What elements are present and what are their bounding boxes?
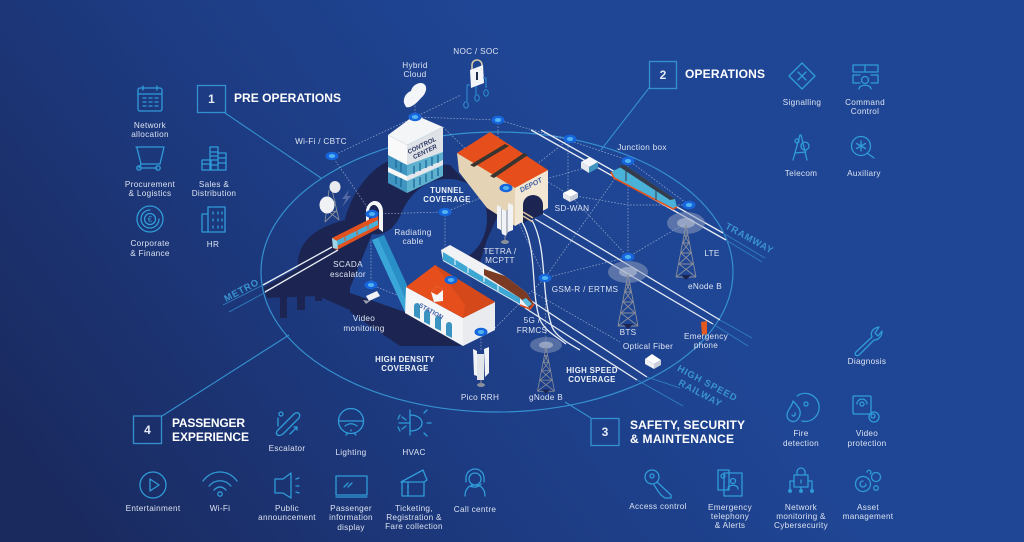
- station ground shadow: [350, 293, 462, 346]
- heading: operations: OPERATIONS: [685, 67, 765, 81]
- map labels: eNode B: [688, 282, 722, 291]
- map labels: LTE: [704, 249, 720, 258]
- label: access control: Access control: [629, 502, 687, 511]
- network map illustration: [162, 47, 775, 418]
- map labels: Wi-Fi / CBTC: [295, 137, 347, 146]
- icon: wifi: [203, 472, 237, 496]
- callout connector lines: [162, 88, 649, 418]
- panel: passenger experience: [126, 408, 496, 532]
- heading: safety: SAFETY, SECURITY: [630, 418, 745, 432]
- label: sales: Distribution: [192, 189, 236, 198]
- icon: sales bars: [202, 147, 226, 170]
- map labels: phone: [694, 341, 718, 350]
- label: network allocation: Network: [134, 121, 167, 130]
- map labels: TETRA /: [483, 247, 517, 256]
- map labels: Optical Fiber: [623, 342, 673, 351]
- map labels: escalator: [330, 270, 366, 279]
- map labels: Junction box: [617, 143, 667, 152]
- map labels: Pico RRH: [461, 393, 499, 402]
- Pico RRH antenna: [473, 347, 489, 387]
- section number 3: [591, 418, 619, 446]
- label: network monitoring: monitoring &: [776, 512, 826, 521]
- map labels: Cloud: [404, 70, 427, 79]
- map labels: HIGH DENSITY: [375, 355, 435, 364]
- heading: passenger experience: PASSENGER: [172, 416, 245, 430]
- label: call centre: Call centre: [454, 505, 496, 514]
- label: network allocation: allocation: [131, 130, 169, 139]
- label: ticketing: Fare collection: [385, 522, 443, 531]
- label: ticketing: Registration &: [386, 513, 442, 522]
- label: asset management: management: [843, 512, 894, 521]
- icon: video protection: [853, 396, 879, 422]
- line names: METRO: [222, 277, 261, 305]
- panel: safety security and maintenance: [591, 327, 894, 530]
- icon: telecom: [793, 135, 809, 160]
- icon: euro coin: [137, 206, 163, 232]
- TETRA antenna: [497, 203, 513, 244]
- icon: command control: [853, 65, 878, 89]
- heading: pre operations: PRE OPERATIONS: [234, 91, 341, 105]
- heading: passenger experience: EXPERIENCE: [172, 430, 249, 444]
- icon: lighting: [338, 408, 364, 435]
- map labels: BTS: [620, 328, 637, 337]
- section number 1: 1: [208, 92, 215, 106]
- dark tunnel ground shape: [263, 160, 498, 316]
- Wi-Fi tower with dishes: [320, 181, 351, 222]
- icon: network security: [789, 468, 813, 492]
- label: HVAC: HVAC: [402, 448, 426, 457]
- label: passenger display: Passenger: [330, 504, 372, 513]
- label: fire detection: detection: [783, 439, 819, 448]
- map labels: COVERAGE: [568, 375, 616, 384]
- lightning mark: [342, 190, 351, 207]
- heading: safety: & MAINTENANCE: [630, 432, 734, 446]
- control center label: CENTER: [412, 143, 439, 161]
- label: emergency telephony: & Alerts: [715, 521, 745, 530]
- panel: operations: [650, 62, 885, 178]
- icon: call centre: [465, 469, 485, 496]
- label: procurement: Procurement: [125, 180, 176, 189]
- map labels: monitoring: [343, 324, 385, 333]
- control center label: CONTROL: [406, 136, 438, 156]
- icon: signalling: [789, 63, 815, 89]
- icon: euro coin: €: [148, 215, 153, 224]
- escalator: [372, 235, 407, 312]
- icon: escalator: [276, 412, 300, 435]
- label: corporate: & Finance: [130, 249, 170, 258]
- map labels: HIGH SPEED: [566, 366, 618, 375]
- label: diagnosis: Diagnosis: [848, 357, 886, 366]
- station building: [405, 265, 495, 346]
- icon: asset management: [856, 470, 880, 492]
- NOC SOC lock icon: [464, 60, 488, 108]
- label: network monitoring: Network: [785, 503, 818, 512]
- map labels: NOC / SOC: [453, 47, 499, 56]
- tunnel coverage lighter area: [350, 179, 487, 312]
- metro tunnel portal: [366, 201, 383, 232]
- label: video protection: protection: [848, 439, 887, 448]
- map labels: Video: [353, 314, 375, 323]
- label: network monitoring: Cybersecurity: [774, 521, 829, 530]
- section number 4: 4: [144, 423, 151, 437]
- SD-WAN box: [563, 189, 578, 202]
- optical fiber box: [645, 354, 661, 369]
- label: ticketing: Ticketing,: [395, 504, 433, 513]
- label: wifi: Wi-Fi: [210, 504, 230, 513]
- label: asset management: Asset: [857, 503, 879, 512]
- viaduct pillars: [280, 278, 322, 318]
- label: public announcement: Public: [275, 504, 299, 513]
- metro track: [223, 247, 338, 312]
- label: auxiliary: Auxiliary: [847, 169, 881, 178]
- icon: fire detection: [787, 393, 819, 422]
- label: passenger display: display: [337, 523, 365, 532]
- label: HR: HR: [207, 240, 219, 249]
- metro train: [332, 215, 379, 250]
- LTE tower: [667, 212, 705, 280]
- map labels: [295, 47, 729, 402]
- label: emergency telephony: telephony: [711, 512, 750, 521]
- label: video protection: Video: [856, 429, 878, 438]
- icon: emergency telephony: [718, 470, 742, 496]
- label: corporate: Corporate: [130, 239, 170, 248]
- icon: access key: [645, 470, 671, 498]
- map labels: COVERAGE: [381, 364, 429, 373]
- BTS tower: [608, 261, 648, 329]
- icon: network allocation calendar: [138, 86, 162, 111]
- label: procurement: & Logistics: [129, 189, 171, 198]
- section number 3: 3: [602, 425, 609, 439]
- video camera: [363, 291, 380, 304]
- emergency phone: [701, 321, 707, 335]
- map labels: cable: [402, 237, 424, 246]
- depot building: [457, 132, 548, 226]
- tram: [611, 165, 677, 209]
- icon: public announcement: [275, 473, 299, 498]
- label: passenger display: information: [329, 513, 373, 522]
- network nodes: [326, 113, 696, 336]
- coverage ellipse: [261, 132, 733, 412]
- map labels: COVERAGE: [423, 195, 471, 204]
- tramway track: [531, 130, 765, 262]
- icon: diagnosis wrench: [855, 327, 882, 356]
- label: escalator: Escalator: [269, 444, 305, 453]
- icon: passenger display: [336, 476, 367, 497]
- map labels: MCPTT: [485, 256, 515, 265]
- label: fire detection: Fire: [793, 429, 809, 438]
- icon: entertainment: [140, 472, 166, 498]
- map labels: Hybrid: [402, 61, 428, 70]
- map labels: TUNNEL: [430, 186, 464, 195]
- control center building: [388, 115, 443, 193]
- map labels: SCADA: [333, 260, 363, 269]
- line names: TRAMWAY: [723, 221, 775, 257]
- high speed train: [441, 245, 534, 309]
- section number 2: [650, 62, 676, 88]
- depot label: DEPOT: [519, 177, 544, 194]
- label: telecom: Telecom: [785, 169, 817, 178]
- map labels: gNode B: [529, 393, 563, 402]
- map labels: Radiating: [394, 228, 432, 237]
- icon: HR office: [202, 207, 225, 232]
- icon: HVAC: [398, 410, 431, 436]
- section number 1: [198, 86, 226, 112]
- section number 4: [134, 416, 162, 444]
- label: entertainment: Entertainment: [126, 504, 181, 513]
- hybrid cloud icon: [404, 83, 426, 107]
- label: emergency telephony: Emergency: [708, 503, 753, 512]
- label: public announcement: announcement: [258, 513, 316, 522]
- map labels: Emergency: [684, 332, 729, 341]
- high speed tracks: [522, 213, 752, 406]
- label: sales: Sales &: [199, 180, 229, 189]
- label: command control: Command: [845, 98, 885, 107]
- label: lighting: Lighting: [335, 448, 367, 457]
- control center label: [406, 136, 441, 162]
- panel: pre operations: [125, 86, 341, 258]
- map labels: 5G /: [524, 316, 541, 325]
- label: signalling: Signalling: [783, 98, 821, 107]
- icon: auxiliary: [852, 136, 874, 158]
- label: command control: Control: [851, 107, 879, 116]
- network dashed links: [332, 95, 689, 350]
- section number 2: 2: [660, 68, 667, 82]
- gNode B tower: [530, 337, 562, 394]
- line names: [222, 221, 775, 410]
- icon: shopping cart: [136, 147, 164, 170]
- map labels: GSM-R / ERTMS: [552, 285, 618, 294]
- map labels: FRMCS: [517, 326, 548, 335]
- line names: HIGH SPEED: [675, 363, 739, 404]
- junction box: [581, 157, 598, 173]
- station label: STATION: [417, 302, 444, 321]
- map labels: SD-WAN: [555, 204, 589, 213]
- line names: RAILWAY: [676, 378, 724, 410]
- icon: ticketing: [401, 470, 427, 496]
